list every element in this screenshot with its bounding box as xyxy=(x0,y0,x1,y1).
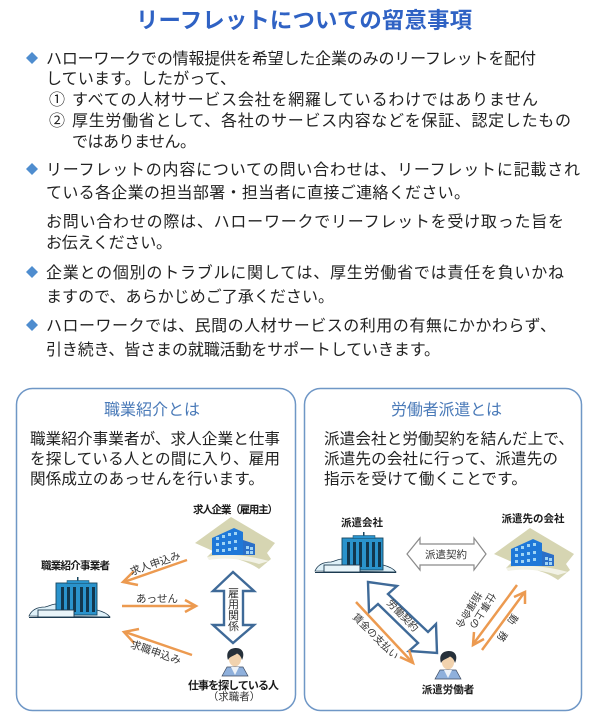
arrow: 労働契約: 労働契約 xyxy=(384,596,421,634)
note 4 xyxy=(26,317,556,359)
panel text: 職業紹介: 職業紹介事業者が、求人企業と仕事 xyxy=(30,430,280,448)
icon: client office xyxy=(494,528,574,580)
panel: 労働者派遣とは xyxy=(304,388,582,710)
arrow label: 仕事上の指揮命令 xyxy=(452,589,499,631)
label: 求職者: 仕事を探している人 xyxy=(188,678,279,692)
arrow label: 勤務: 勤 務 xyxy=(494,612,521,644)
label: 求職者: （求職者） xyxy=(208,690,260,703)
note 2 xyxy=(26,161,580,252)
note 2: お問い合わせの際は、ハローワークでリーフレットを受け取った旨を xyxy=(46,213,564,231)
arrow: 指揮命令 xyxy=(473,585,517,645)
panel heading: 労働者派遣: 労働者派遣とは xyxy=(391,401,502,419)
panel text: 職業紹介 xyxy=(30,430,280,488)
arrow label: あっせん: あっせん xyxy=(136,593,178,605)
arrow: 雇用関係: 係 xyxy=(228,620,239,633)
arrow: 勤務 xyxy=(482,592,525,650)
label: 派遣労働者: 派遣労働者 xyxy=(422,683,474,696)
note 1: しています。したがって、 xyxy=(46,70,236,88)
note 1 xyxy=(26,50,571,151)
note 2: ている各企業の担当部署・担当者に直接ご連絡ください。 xyxy=(46,184,470,202)
note 3: ますので、あらかじめご了承ください。 xyxy=(46,288,334,306)
arrow: 雇用関係: 用 xyxy=(228,599,239,611)
note 2: お伝えください。 xyxy=(46,234,172,252)
arrow: 雇用関係: 関 xyxy=(228,609,239,622)
panel text: 労働者派遣: 指示を受けて働くことです。 xyxy=(324,470,527,488)
arrow: 求人申込み xyxy=(123,560,187,585)
icon: employer office xyxy=(195,517,275,569)
arrow: 労働契約 xyxy=(368,582,437,653)
arrow label: 仕事上の指揮命令: 仕事上の xyxy=(466,590,499,631)
note 1: ② xyxy=(49,112,65,130)
label: 派遣先の会社: 派遣先の会社 xyxy=(502,512,565,525)
note 1: ではありません。 xyxy=(72,133,196,151)
icon: agency building xyxy=(29,577,110,618)
label: 求人企業: 求人企業（雇用主） xyxy=(193,503,278,516)
arrow: 賃金の支払い xyxy=(356,602,413,663)
note 1: 厚生労働省として、各社のサービス内容などを保証、認定したもの xyxy=(72,112,571,130)
icon: dispatch company building xyxy=(315,532,396,572)
title: リーフレットについての留意事項 xyxy=(136,8,473,33)
panel text: 労働者派遣: 派遣先の会社に行って、派遣先の xyxy=(324,450,558,468)
note 4: ハローワークでは、民間の人材サービスの利用の有無にかかわらず、 xyxy=(46,317,556,335)
arrow: 雇用関係: 雇 xyxy=(228,587,239,600)
arrow: あっせん xyxy=(122,600,196,612)
arrow label: 求職申込み: 求職申込み xyxy=(129,638,183,667)
arrow: 派遣契約 xyxy=(407,538,486,570)
arrow: 雇用関係 xyxy=(213,572,254,643)
label: 求職者 xyxy=(188,678,279,703)
notes list xyxy=(26,50,580,359)
arrow label: 求人申込み: 求人申込み xyxy=(128,549,182,578)
panel text: 職業紹介: を探している人との間に入り、雇用 xyxy=(30,450,280,468)
arrow label: 仕事上の指揮命令: 指揮命令 xyxy=(452,589,485,630)
panel: 職業紹介とは xyxy=(16,388,296,710)
panel text: 職業紹介: 関係成立のあっせんを行います。 xyxy=(30,470,264,488)
arrow label: 賃金の支払い: 賃金の支払い xyxy=(350,611,401,662)
note 3: 企業との個別のトラブルに関しては、厚生労働省では責任を負いかね xyxy=(46,263,564,282)
note 1: ① xyxy=(49,91,65,109)
panel heading: 職業紹介: 職業紹介とは xyxy=(104,401,200,419)
panel text: 労働者派遣 xyxy=(324,430,574,488)
note 1: ハローワークでの情報提供を希望した企業のみのリーフレットを配付 xyxy=(46,50,536,68)
arrow: 求職申込み xyxy=(124,629,192,655)
note 2: リーフレットの内容についての問い合わせは、リーフレットに記載され xyxy=(46,161,580,179)
icon: job seeker xyxy=(222,648,248,676)
arrow: 派遣契約: 派遣契約 xyxy=(425,548,467,561)
icon: dispatched worker xyxy=(435,651,461,679)
label: 職業紹介事業者: 職業紹介事業者 xyxy=(41,559,110,572)
note 1: すべての人材サービス会社を網羅しているわけではありません xyxy=(72,91,538,109)
note 4: 引き続き、皆さまの就職活動をサポートしていきます。 xyxy=(46,341,440,359)
label: 派遣会社: 派遣会社 xyxy=(341,516,383,529)
panel text: 労働者派遣: 派遣会社と労働契約を結んだ上で、 xyxy=(324,430,574,448)
note 3 xyxy=(26,263,564,306)
